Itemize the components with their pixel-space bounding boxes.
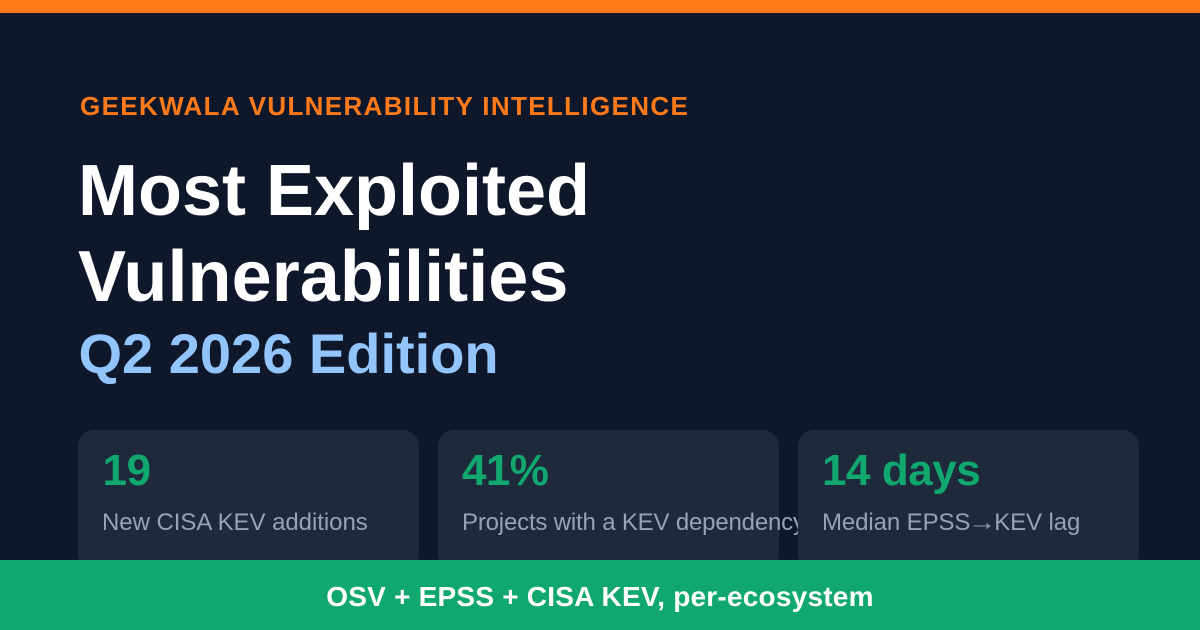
title xyxy=(78,151,590,317)
stat label: New CISA KEV additions xyxy=(102,509,368,536)
stat label: Median EPSS KEV lag xyxy=(822,509,1080,536)
stat card: EPSS to KEV lag xyxy=(798,430,1139,570)
subtitle: Q2 2026 Edition xyxy=(78,322,499,385)
title: Vulnerabilities xyxy=(78,237,569,317)
stat label: Projects with a KEV dependency xyxy=(462,509,805,536)
stat label: → xyxy=(968,509,997,536)
stat value: 41% xyxy=(462,446,548,495)
bottom banner: OSV + EPSS + CISA KEV, per-ecosystem xyxy=(326,581,874,612)
eyebrow heading: GEEKWALA VULNERABILITY INTELLIGENCE xyxy=(80,91,689,121)
stat card: KEV additions xyxy=(78,430,419,570)
title: Most Exploited xyxy=(78,151,590,231)
top accent bar xyxy=(0,0,1200,13)
stat card: projects with KEV dependency xyxy=(438,430,779,570)
stat value: 19 xyxy=(102,446,151,495)
bottom banner xyxy=(0,560,1200,630)
stat value: 14 days xyxy=(822,446,980,495)
